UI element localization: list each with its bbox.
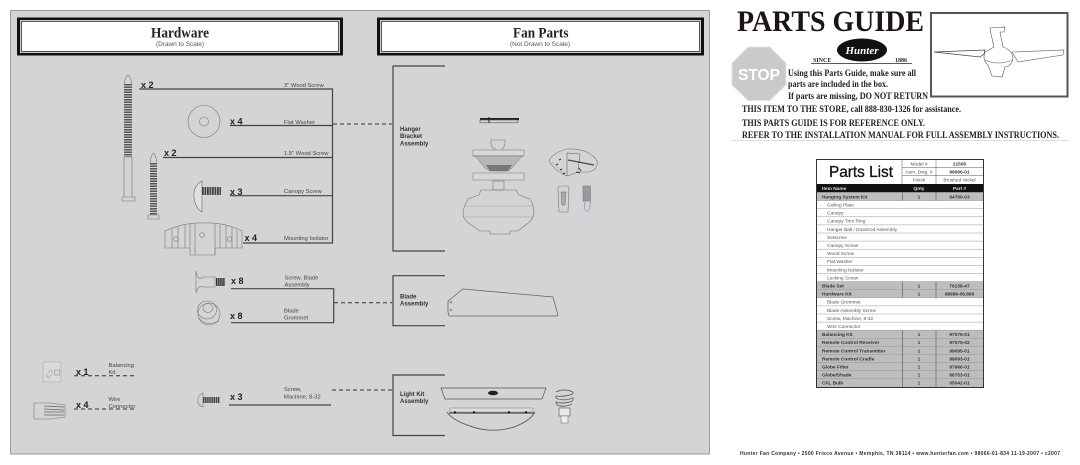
- item: wire connector: Wire: [108, 397, 120, 403]
- item: mounting isolator: x 4: [244, 233, 257, 243]
- item: flat washer: [188, 106, 315, 138]
- bracket: light kit assembly: Assembly: [400, 399, 429, 405]
- bracket: hanger bracket assembly: [393, 66, 445, 251]
- column headers: Qnty: [914, 186, 925, 192]
- item rows: Canopy Trim Ring: [827, 219, 866, 225]
- text: parts guide instructions: Using this Parts Guide, make sure all: [788, 69, 916, 79]
- image: ceiling fan illustration: [931, 13, 1068, 96]
- table heading: Parts List: [829, 164, 894, 181]
- item: machine screw: [198, 387, 331, 407]
- item: canopy screw: Canopy Screw: [284, 189, 323, 195]
- text: parts guide instructions: If parts are missing, DO NOT RETURN: [788, 92, 928, 102]
- item: 1.5 inch wood screw: 1.5" Wood Screw: [284, 151, 329, 157]
- item rows: 1: [918, 340, 921, 346]
- item rows: 68753-01: [949, 373, 970, 379]
- model information: 21505: [953, 162, 966, 168]
- item rows: Setscrew: [827, 235, 847, 241]
- part: fan motor and canopy: [463, 140, 534, 234]
- heading: Hardware: (Drawn to Scale): [156, 41, 204, 48]
- logo: Hunter since 1886: [811, 38, 912, 64]
- item: balancing kit: x 1: [76, 367, 89, 377]
- bracket: light kit assembly: [393, 375, 445, 436]
- item: wire connector: Connector: [108, 404, 135, 410]
- item: blade screw: [196, 271, 318, 293]
- item rows: Remote Control Transmitter: [822, 348, 886, 354]
- item rows: Blade Grommet: [827, 300, 861, 306]
- column lines: [902, 192, 936, 387]
- kit rows shading: [817, 192, 983, 387]
- item rows: 1: [918, 284, 921, 290]
- item: machine screw: x 3: [230, 392, 243, 402]
- model information: Asm. Dwg. #: [905, 170, 933, 176]
- logo: Hunter since 1886: SINCE: [813, 58, 831, 64]
- item rows: 05042-01: [949, 381, 970, 387]
- item rows: 99095-01: [949, 348, 970, 354]
- footer: company information: Hunter Fan Company • 2500 Frisco Avenue • Memphis, TN 38114 • www.hunterfan.com • 98066-01-834 11-19-2007 • c2007: [740, 451, 1060, 457]
- item: flat washer: Flat Washer: [284, 120, 315, 126]
- blade hardware connector lines: [231, 289, 334, 323]
- item rows: Ceiling Plate: [827, 202, 854, 208]
- item rows: 76238-47: [949, 284, 970, 290]
- item rows: 1: [918, 194, 921, 200]
- item rows: Globe/Shade: [822, 373, 852, 379]
- dashed link to light kit assembly: [332, 389, 392, 391]
- item rows: Blade Set: [822, 284, 844, 290]
- item rows: 1: [918, 332, 921, 338]
- item: wire connector: [34, 397, 136, 419]
- item rows: Canopy Screw: [827, 243, 859, 249]
- item rows: 1: [918, 373, 921, 379]
- column headers: Item Name: [822, 186, 847, 192]
- part: hanging plate: [480, 117, 519, 123]
- logo: Hunter since 1886: Hunter: [844, 45, 879, 57]
- item rows: Hardware Kit: [822, 292, 852, 298]
- item: blade screw: x 8: [231, 276, 244, 286]
- model information: Brushed Nickel: [943, 178, 976, 184]
- item rows: 1: [918, 356, 921, 362]
- item rows: 1: [918, 381, 921, 387]
- item: mounting isolator: [165, 223, 329, 255]
- logo: Hunter since 1886: 1886: [895, 58, 907, 64]
- title: Parts Guide: PARTS GUIDE: [737, 5, 924, 38]
- bracket: hanger bracket assembly: Assembly: [400, 142, 429, 148]
- column headers: Part #: [953, 186, 966, 192]
- heading: Hardware: [17, 18, 343, 56]
- item: balancing kit: [43, 362, 136, 382]
- bracket: blade assembly: Blade: [400, 294, 417, 300]
- text: parts guide instructions: parts are included in the box.: [788, 80, 888, 90]
- item: 3 inch wood screw: [122, 75, 324, 201]
- item: blade grommet: x 8: [230, 311, 243, 321]
- heading: Fan Parts: (Not Drawn to Scale): [510, 41, 570, 48]
- item: wire connector: x 4: [76, 400, 89, 410]
- hanger bracket hardware connector lines: [139, 89, 332, 243]
- item rows: Blade Assembly Screw: [827, 308, 876, 314]
- item: mounting isolator: Mounting Isolator: [284, 236, 329, 242]
- item rows: 98989-08.860: [945, 292, 975, 298]
- item rows: 94760-03: [949, 194, 970, 200]
- item: canopy screw: x 3: [230, 187, 243, 197]
- item: flat washer: x 4: [230, 116, 243, 126]
- item: blade grommet: Grommet: [284, 316, 309, 322]
- part: remote control transmitter: [583, 186, 591, 212]
- text: parts guide instructions: THIS ITEM TO THE STORE, call 888-830-1326 for assistance.: [742, 105, 961, 115]
- item rows: 1: [918, 292, 921, 298]
- icon: stop sign: STOP: [738, 67, 780, 84]
- item rows: Hanger Ball / Downrod Assembly: [827, 227, 898, 233]
- part: light kit fitter: [441, 388, 546, 399]
- part: globe shade: [447, 408, 535, 430]
- bracket: hanger bracket assembly: Hanger: [400, 127, 421, 133]
- dashed link to blade assembly: [334, 302, 392, 304]
- item: machine screw: Machine, 8-32: [284, 394, 321, 400]
- item rows: 99093-01: [949, 356, 970, 362]
- item: blade screw: Screw, Blade: [284, 276, 318, 282]
- row lines: [817, 201, 983, 379]
- item: canopy screw: [194, 181, 323, 212]
- item: 1.5 inch wood screw: [148, 148, 329, 219]
- model information: [902, 160, 983, 184]
- table: parts list: [816, 160, 984, 388]
- item: 1.5 inch wood screw: x 2: [164, 148, 177, 158]
- item: balancing kit: Balancing: [108, 363, 134, 369]
- item rows: 97075-02: [949, 340, 970, 346]
- item: 3 inch wood screw: 3" Wood Screw: [284, 83, 324, 89]
- heading: Fan Parts: [377, 18, 704, 56]
- column headers: [817, 184, 983, 192]
- bracket: blade assembly: Assembly: [400, 302, 429, 308]
- part: CFL bulb: [556, 390, 573, 423]
- heading: Hardware: Hardware: [151, 26, 209, 42]
- bracket: light kit assembly: Light Kit: [400, 392, 424, 398]
- model information: Model #: [910, 162, 928, 168]
- icon: stop sign: [732, 47, 786, 100]
- item: blade grommet: Blade: [284, 308, 299, 314]
- item rows: Canopy: [827, 211, 844, 217]
- item rows: 1: [918, 348, 921, 354]
- item rows: Hanging System Kit: [822, 194, 868, 200]
- item rows: 97075-01: [949, 332, 970, 338]
- item: balancing kit: Kit: [108, 370, 116, 376]
- item: machine screw: Screw,: [284, 387, 302, 393]
- text: parts guide instructions: [742, 69, 1059, 141]
- bracket: blade assembly: [393, 276, 445, 326]
- item rows: 1: [918, 364, 921, 370]
- item rows: Screw, Machine, 8-32: [827, 316, 873, 322]
- item rows: Wood Screw: [827, 251, 855, 257]
- item rows: CFL Bulb: [822, 381, 843, 387]
- part: light kit adapter plate: [549, 149, 597, 176]
- heading: Fan Parts: Fan Parts: [513, 26, 569, 42]
- item rows: Balancing Kit: [822, 332, 853, 338]
- item rows: [822, 194, 975, 387]
- item: blade grommet: [198, 301, 309, 325]
- item rows: Wire Connector: [827, 324, 861, 330]
- model information: Finish: [913, 178, 926, 184]
- item rows: Remote Control Cradle: [822, 356, 875, 362]
- item rows: Flat Washer: [827, 259, 853, 265]
- model information: 99066-01: [949, 170, 970, 176]
- part: remote control cradle: [558, 186, 569, 212]
- dashed link to hanger bracket assembly: [333, 123, 392, 125]
- item rows: Locking Screw: [827, 275, 859, 281]
- item rows: Mounting Isolator: [827, 267, 864, 273]
- text: parts guide instructions: THIS PARTS GUIDE IS FOR REFERENCE ONLY.: [742, 119, 925, 129]
- part: fan blade: [448, 289, 558, 316]
- item rows: 97966-01: [949, 364, 970, 370]
- item rows: Globe Filter: [822, 364, 849, 370]
- panel: grey parts background: [10, 10, 710, 454]
- item: 3 inch wood screw: x 2: [141, 80, 154, 90]
- item: blade screw: Assembly: [284, 282, 310, 288]
- item rows: Remote Control Receiver: [822, 340, 879, 346]
- bracket: hanger bracket assembly: Bracket: [400, 134, 422, 140]
